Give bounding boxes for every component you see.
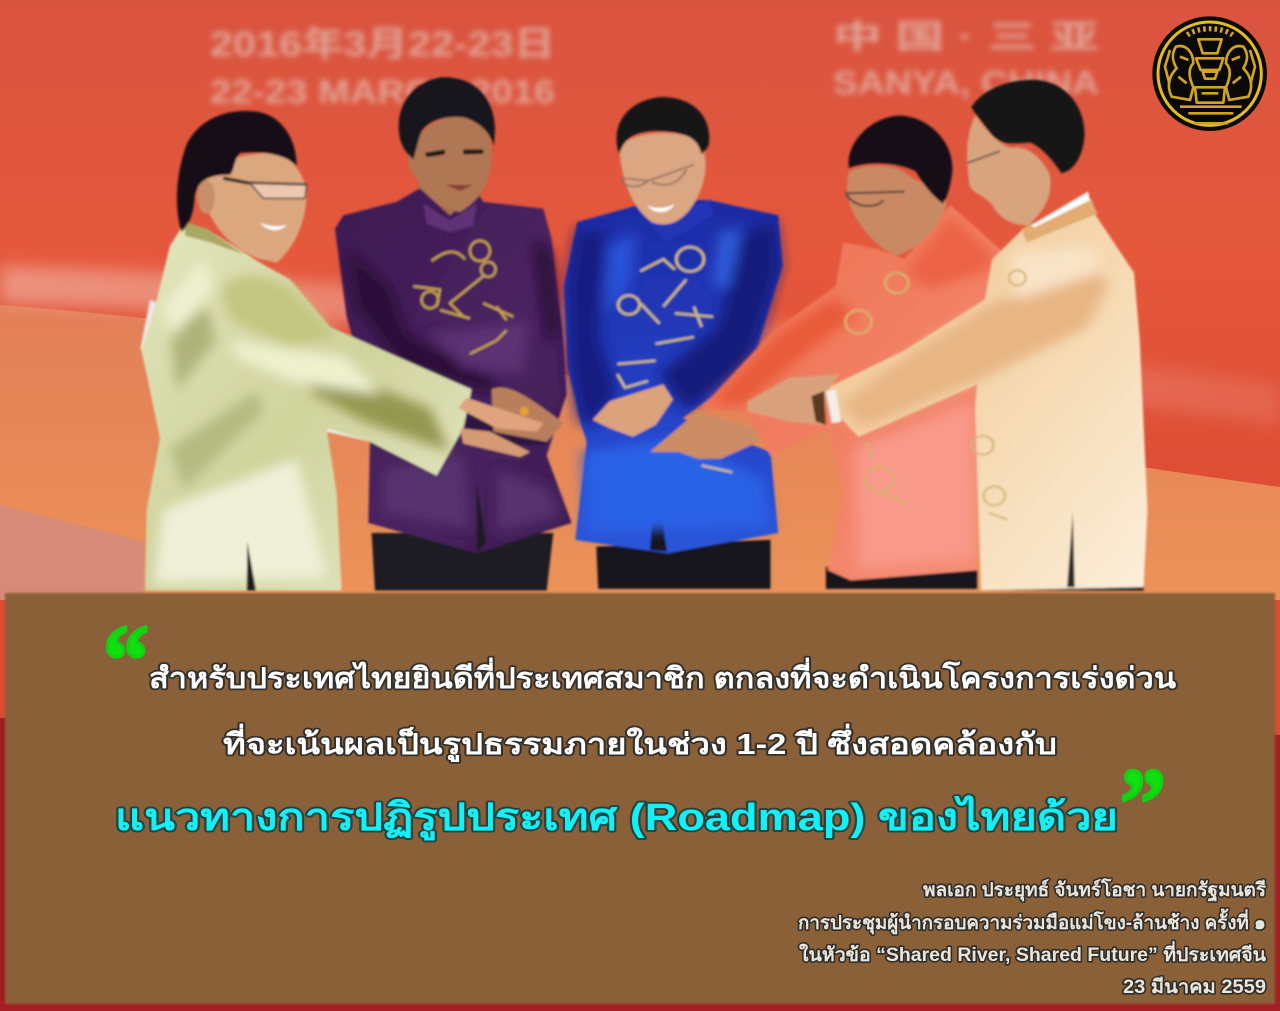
blurred backdrop lettering: 2016年3月22-23日: [210, 25, 555, 64]
government seal emblem: [1152, 16, 1267, 131]
person 1: green satin jacket: [141, 111, 472, 591]
attribution: date: 23 มีนาคม 2559: [1123, 976, 1266, 998]
text panel: brown quote box: [5, 593, 1275, 1004]
person 3: blue jacket: [564, 97, 783, 589]
quote line 3: highlighted: แนวทางการปฏิรูปประเทศ (Roadmap) ของไทยด้วย: [115, 795, 1118, 841]
blurred backdrop lettering: 中 国 · 三 亚: [833, 18, 1099, 55]
blurred backdrop lettering: SANYA, CHINA: [833, 64, 1099, 101]
attribution block: [798, 878, 1267, 998]
hands: right group: [593, 374, 841, 459]
person 4: salmon jacket: [702, 116, 1004, 589]
attribution: meeting: การประชุมผู้นำกรอบความร่วมมือแม่โขง-ล้านช้าง ครั้งที่ ๑: [798, 908, 1266, 935]
quote line 2: ที่จะเน้นผลเป็นรูปธรรมภายในช่วง 1-2 ปี ซึ่งสอดคล้องกับ: [223, 723, 1057, 762]
quote line 1: สำหรับประเทศไทยยินดีที่ประเทศสมาชิก ตกลงที่จะดำเนินโครงการเร่งด่วน: [149, 657, 1176, 695]
attribution: theme: ในหัวข้อ “Shared River, Shared Future” ที่ประเทศจีน: [799, 941, 1266, 966]
person 2: purple jacket: [335, 77, 572, 591]
hands: left pair: [458, 388, 563, 457]
closing quotation mark: ”: [1120, 748, 1166, 859]
blurred backdrop lettering: 22-23 MARCH 2016: [210, 73, 555, 110]
person 5: cream jacket: [828, 80, 1147, 591]
attribution: speaker: พลเอก ประยุทธ์ จันทร์โอชา นายกรัฐมนตรี: [923, 878, 1267, 903]
seal ornament: urn and guardian lions: [1165, 29, 1255, 123]
photo: five leaders joining hands: [141, 77, 1147, 591]
blurred backdrop lettering: [210, 18, 1099, 110]
opening quotation mark: “: [103, 604, 149, 715]
